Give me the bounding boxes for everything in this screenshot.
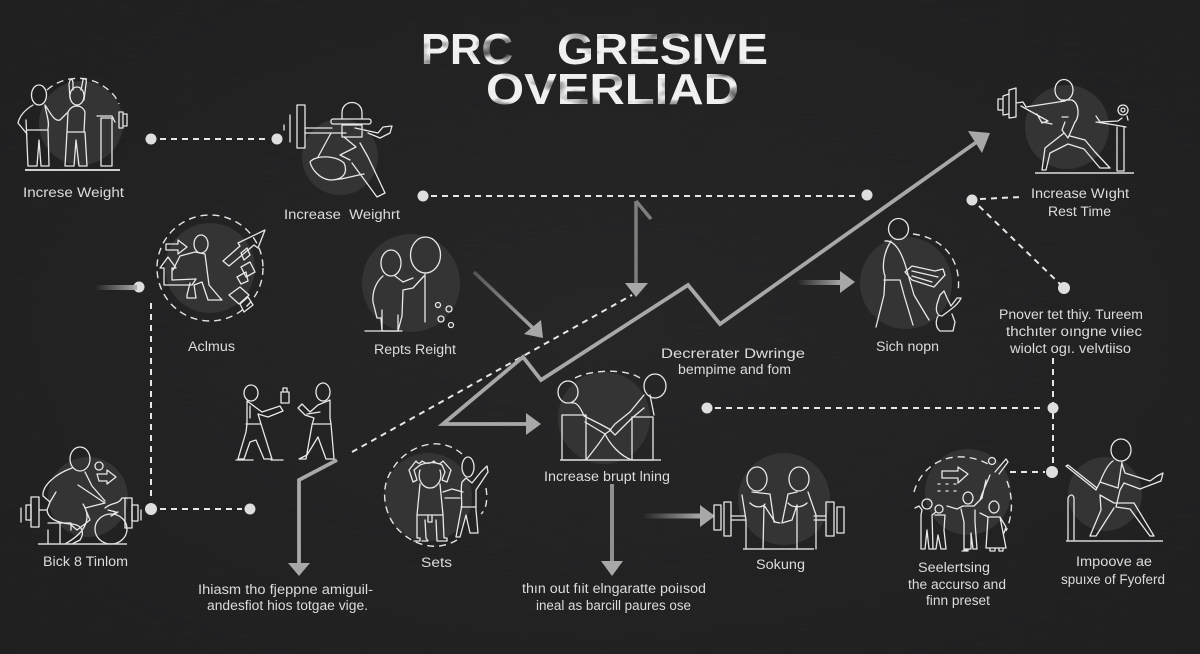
icon: group of figures with arrow	[914, 449, 1011, 551]
title	[421, 25, 768, 114]
icon: seated lifter with dumbbell	[21, 447, 141, 544]
arrow: right to barbell	[642, 505, 715, 527]
rising progress arrow	[288, 131, 990, 576]
connector dots	[95, 134, 1070, 515]
icon: lunging figure with staff	[1066, 439, 1163, 541]
icon: squat with barbell	[284, 102, 392, 197]
icon: two figures holding barbell	[714, 453, 844, 549]
label: Sich nopn: Sich nopn	[876, 339, 939, 354]
arrow: right to walker	[797, 271, 855, 293]
label: Increase brupt lning: Increase brupt lning	[544, 469, 670, 484]
label: Impoove note: spuıxe of Fyoferd	[1061, 572, 1165, 587]
text: lower centre note	[522, 581, 706, 613]
label: Impoove note	[1061, 554, 1165, 587]
label: Increase Wight Rest Time: Increase Wıght	[1031, 186, 1129, 201]
label: Sets: Sets	[421, 555, 452, 570]
arrow: diagonal to centre	[474, 272, 543, 338]
dashed connector lines	[151, 139, 1060, 509]
text: lower left note: Ihiasm tho fjeppne amiguil-	[198, 582, 373, 597]
text: lower left note: andesfiot hios totgae vige.	[207, 598, 368, 613]
arrow: down below centre	[601, 484, 623, 576]
title: GRESIVE	[557, 25, 768, 74]
label: Increase Wight Rest Time: Rest Time	[1048, 204, 1111, 219]
text: centre note	[661, 346, 805, 377]
text: centre note: bempime and fom	[678, 362, 791, 377]
icon: two flexing figures in dashed circle	[384, 444, 488, 546]
icon: lunge with arrows in dashed circle	[157, 215, 265, 321]
label: Seelertsing note: finn preset	[926, 593, 990, 608]
icon: walker carrying load	[860, 218, 961, 331]
label: Sokung: Sokung	[756, 557, 805, 572]
label: Seelertsing note: the accurso and	[908, 577, 1006, 592]
text: upper right note	[999, 307, 1143, 356]
icon: two people and weight pole	[18, 78, 127, 170]
text: upper right note: Pnover tet thiy. Tureem	[999, 307, 1143, 322]
label: Increase Wight Rest Time	[1031, 186, 1129, 219]
text: upper right note: thchıter oıngne vıiec	[1006, 324, 1142, 339]
arrow: vertical down to trend	[625, 201, 651, 297]
label: Seelertsing note	[908, 560, 1006, 608]
text: lower centre note: ineal as barcill paures ose	[536, 598, 691, 613]
label: Increase Weighrt: Increase Weighrt	[284, 207, 400, 222]
icon: two seated figures shaking hands	[558, 371, 666, 464]
text: upper right note: wiolct ogı. velvtiiso	[1009, 341, 1131, 356]
label: Aclmus: Aclmus	[188, 339, 235, 354]
label: Repts Reight: Repts Reight	[374, 342, 456, 357]
icon: lifter pushing weight with small figure	[998, 80, 1134, 173]
text: centre note: Decrerater Dwringe	[661, 346, 805, 361]
title: PRC	[421, 25, 513, 74]
label: Seelertsing note: Seelertsing	[918, 560, 990, 575]
title: OVERLIAD	[486, 65, 739, 114]
label: Increse Weight: Increse Weight	[23, 185, 124, 200]
icon: figure with balloon	[362, 234, 460, 332]
label: Bick 8 Tinlom: Bick 8 Tinlom	[43, 554, 128, 569]
text: lower left note	[198, 582, 373, 613]
text: lower centre note: thın out fıit elngaratte poiısod	[522, 581, 706, 596]
icon: two figures exchanging	[236, 383, 334, 460]
label: Impoove note: Impoove ae	[1076, 554, 1152, 569]
